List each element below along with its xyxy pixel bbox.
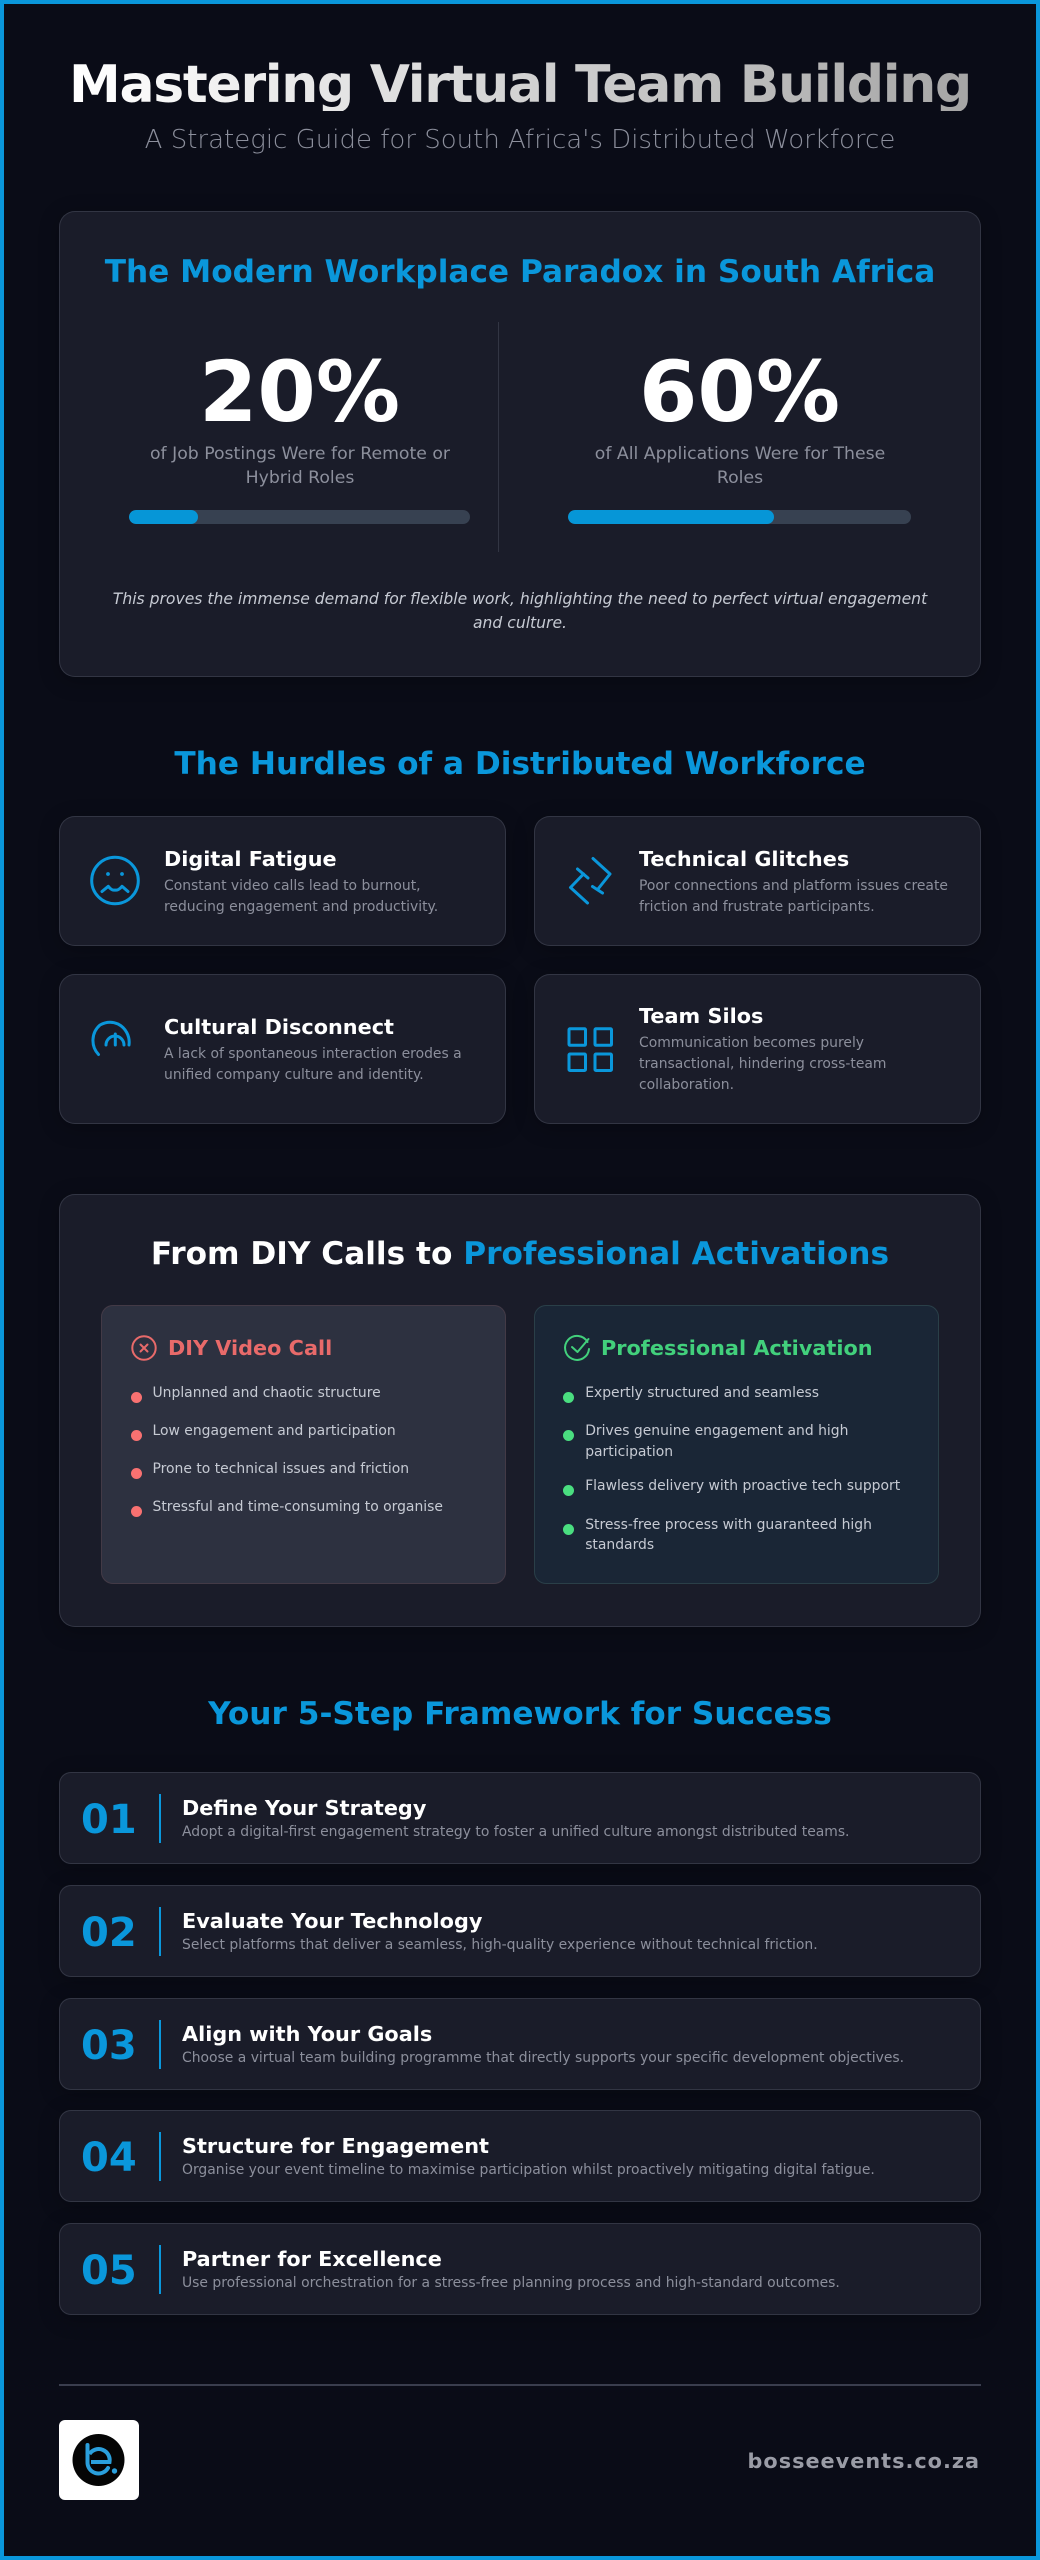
step number: 04: [81, 2134, 137, 2180]
step number: 02: [81, 1910, 137, 1956]
panel: comparison: [59, 1194, 981, 1627]
step number: 01: [81, 1796, 137, 1842]
heading: comparison: From DIY Calls to Professional Activations: [151, 1236, 889, 1272]
list item: standards: [585, 1537, 654, 1553]
stat label: job postings: Hybrid Roles: [246, 468, 354, 488]
description: reducing engagement and productivity.: [164, 899, 438, 915]
description: Poor connections and platform issues create: [639, 878, 948, 894]
title: Cultural Disconnect: [164, 1014, 394, 1038]
step number: 03: [81, 2022, 137, 2068]
step 5: [59, 2223, 981, 2315]
icon: cross circle: [131, 1335, 157, 1361]
list item: Flawless delivery with proactive tech support: [585, 1478, 900, 1494]
stat label: job postings: [150, 444, 450, 488]
card: cultural disconnect: [59, 974, 506, 1124]
description: [164, 1046, 462, 1083]
list item: participation: [585, 1444, 673, 1460]
description: collaboration.: [639, 1077, 734, 1093]
card: digital fatigue: [59, 816, 506, 946]
description: Communication becomes purely: [639, 1035, 864, 1051]
step description: Organise your event timeline to maximise participation whilst proactively mitigating digital fatigue.: [182, 2162, 875, 2178]
step title: Structure for Engagement: [182, 2134, 489, 2158]
card: technical glitches: [534, 816, 981, 946]
column: professional activation: [534, 1305, 939, 1584]
step description: Use professional orchestration for a stress-free planning process and high-standard outcomes.: [182, 2275, 840, 2291]
insight note: This proves the immense demand for flexible work, highlighting the need to perfect virtual engagement: [113, 590, 927, 608]
description: Constant video calls lead to burnout,: [164, 878, 421, 894]
icon: check circle: [564, 1334, 590, 1361]
description: unified company culture and identity.: [164, 1067, 424, 1083]
description: [639, 1035, 886, 1093]
list item: Drives genuine engagement and high: [585, 1423, 848, 1439]
description: transactional, hindering cross-team: [639, 1056, 886, 1072]
title: Team Silos: [639, 1004, 763, 1028]
icon: gauge: [91, 1020, 131, 1056]
step 4: [59, 2110, 981, 2202]
heading: framework: Your 5-Step Framework for Success: [208, 1696, 832, 1732]
list item: Unplanned and chaotic structure: [152, 1384, 381, 1400]
stat: 20 percent: 20%: [199, 343, 400, 441]
stat label: applications: Roles: [717, 468, 763, 488]
icon: broken link arrows: [568, 856, 612, 905]
title: Mastering Virtual Team Building: [69, 55, 971, 115]
title: Technical Glitches: [639, 846, 849, 870]
heading: hurdles: The Hurdles of a Distributed Workforce: [174, 746, 866, 782]
step number: 05: [81, 2248, 137, 2294]
stat label: applications: of All Applications Were for These: [595, 444, 885, 464]
progress bar: 60 percent: [568, 510, 910, 524]
step title: Define Your Strategy: [182, 1796, 426, 1820]
column title: DIY Video Call: [168, 1336, 332, 1360]
insight note: and culture.: [473, 614, 567, 632]
step description: Adopt a digital-first engagement strategy to foster a unified culture amongst distributed teams.: [182, 1824, 849, 1840]
step description: Choose a virtual team building programme that directly supports your specific development objectives.: [182, 2050, 904, 2066]
heading: paradox: The Modern Workplace Paradox in South Africa: [105, 254, 935, 290]
card: team silos: [534, 974, 981, 1124]
icon: grid of squares: [568, 1027, 613, 1072]
step title: Partner for Excellence: [182, 2246, 442, 2270]
logo: [59, 2420, 139, 2500]
subtitle: A Strategic Guide for South Africa's Distributed Workforce: [145, 125, 895, 155]
column: DIY video call: [101, 1305, 506, 1584]
stat label: applications: [595, 444, 885, 488]
description: [164, 878, 438, 915]
description: A lack of spontaneous interaction erodes a: [164, 1046, 462, 1062]
description: friction and frustrate participants.: [639, 899, 875, 915]
step title: Evaluate Your Technology: [182, 1908, 482, 1932]
step title: Align with Your Goals: [182, 2022, 432, 2046]
column title: Professional Activation: [601, 1336, 873, 1360]
list item: Low engagement and participation: [152, 1423, 396, 1439]
list item: Expertly structured and seamless: [585, 1384, 819, 1400]
step 3: [59, 1998, 981, 2090]
list item: [563, 1516, 872, 1553]
list item: Stress-free process with guaranteed high: [585, 1516, 872, 1532]
website: bosseevents.co.za: [748, 2448, 980, 2472]
stat label: job postings: of Job Postings Were for Remote or: [150, 444, 450, 464]
icon: frowning face: [90, 856, 140, 906]
stat: 60 percent: 60%: [639, 343, 840, 441]
list item: [563, 1423, 848, 1460]
step 1: [59, 1772, 981, 1864]
panel: workplace paradox: [59, 211, 981, 677]
list item: Stressful and time-consuming to organise: [152, 1499, 443, 1515]
list item: Prone to technical issues and friction: [152, 1461, 409, 1477]
step description: Select platforms that deliver a seamless, high-quality experience without technical friction.: [182, 1937, 818, 1953]
title: Digital Fatigue: [164, 846, 337, 870]
description: [639, 878, 948, 915]
progress bar: 20 percent: [129, 510, 470, 524]
step 2: [59, 1885, 981, 1977]
insight note: [113, 590, 928, 632]
